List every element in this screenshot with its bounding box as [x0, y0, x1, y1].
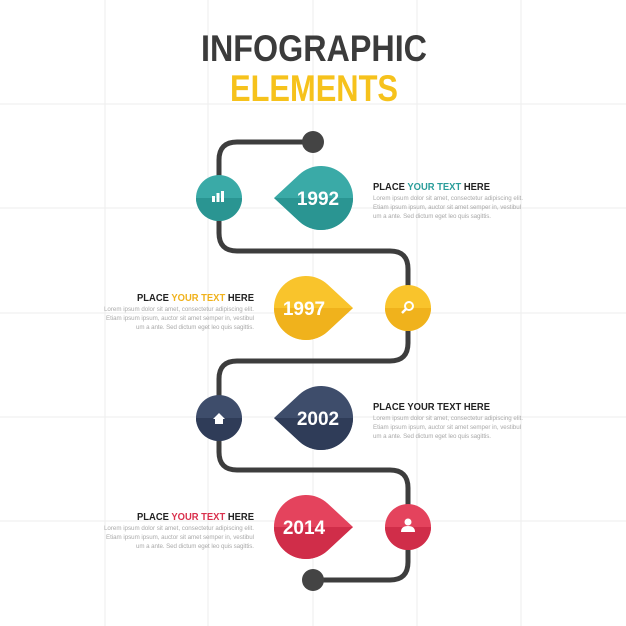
text block 2014: Etiam ipsum ipsum, auctor sit amet semper in, vestibul	[106, 534, 254, 541]
text block 2002: PLACE YOUR TEXT HERE	[373, 402, 490, 413]
drop 2014: 2014	[283, 518, 326, 539]
drop 2014	[274, 495, 353, 559]
step 1992	[196, 166, 523, 230]
text block 1992	[373, 182, 523, 220]
text block 1997: Lorem ipsum dolor sit amet, consectetur adipiscing elit.	[104, 306, 254, 313]
text block 2002	[373, 402, 523, 440]
step 1997	[104, 276, 431, 340]
drop 1992	[274, 166, 353, 230]
text block 2002: Etiam ipsum ipsum, auctor sit amet semper in, vestibul	[373, 424, 521, 431]
drop 1997: 1997	[283, 299, 325, 320]
timeline path	[219, 131, 408, 591]
drop 2002: 2002	[297, 409, 339, 430]
icon: home circle	[196, 395, 242, 441]
title	[201, 28, 427, 109]
drop 1992: 1992	[297, 189, 339, 210]
title: INFOGRAPHIC	[201, 28, 427, 69]
drop 1997	[274, 276, 353, 340]
text block 2014: PLACE YOUR TEXT HERE	[137, 512, 254, 523]
text block 1997: Etiam ipsum ipsum, auctor sit amet semper in, vestibul	[106, 315, 254, 322]
title: ELEMENTS	[230, 68, 398, 109]
text block 2014: um a ante. Sed dictum eget leo quis sagittis.	[136, 543, 254, 550]
text block 1992: PLACE YOUR TEXT HERE	[373, 182, 490, 193]
text block 2002: Lorem ipsum dolor sit amet, consectetur adipiscing elit.	[373, 415, 523, 422]
icon: user circle	[385, 504, 431, 550]
text block 2002: um a ante. Sed dictum eget leo quis sagittis.	[373, 433, 491, 440]
text block 1992: um a ante. Sed dictum eget leo quis sagittis.	[373, 213, 491, 220]
drop 2002	[274, 386, 353, 450]
text block 1997	[104, 293, 254, 331]
text block 1992: Lorem ipsum dolor sit amet, consectetur adipiscing elit.	[373, 195, 523, 202]
step 2014	[104, 495, 431, 559]
icon: search circle	[385, 285, 431, 331]
text block 1997: PLACE YOUR TEXT HERE	[137, 293, 254, 304]
icon: chart circle	[196, 175, 242, 221]
step 2002	[196, 386, 523, 450]
text block 1997: um a ante. Sed dictum eget leo quis sagittis.	[136, 324, 254, 331]
text block 1992: Etiam ipsum ipsum, auctor sit amet semper in, vestibul	[373, 204, 521, 211]
text block 2014: Lorem ipsum dolor sit amet, consectetur adipiscing elit.	[104, 525, 254, 532]
text block 2014	[104, 512, 254, 550]
